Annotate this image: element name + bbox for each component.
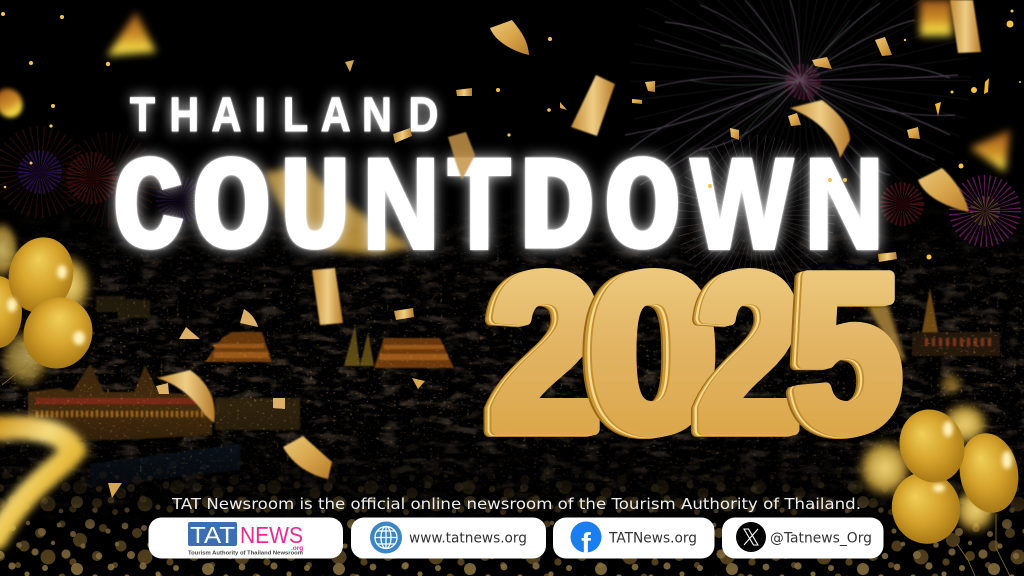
title: COUNTDOWN: U [280, 136, 351, 286]
year 2025 in gold: 2 [490, 228, 602, 476]
title: COUNTDOWN: C [113, 136, 184, 286]
confetti: tiny gold specks [1, 10, 1021, 260]
pill: facebook [553, 518, 714, 560]
pill: website: www.tatnews.org [409, 530, 527, 546]
title: COUNTDOWN: N [804, 133, 884, 276]
city skyline at night [0, 200, 1024, 520]
pill: X account: @Tatnews_Org [770, 530, 872, 546]
firework: right magenta [891, 193, 1003, 229]
logo: TAT blue box [188, 522, 237, 546]
title: COUNTDOWN: D [519, 136, 595, 286]
icon: X logo [736, 522, 766, 552]
title: COUNTDOWN: W [691, 133, 793, 276]
title: COUNTDOWN: N [363, 133, 439, 275]
caption: TAT Newsroom is the official online newsroom of the Tourism Authority of Thailand. [171, 495, 861, 513]
confetti: sharp pieces [108, 20, 989, 498]
year 2025 in gold: 5 [793, 228, 903, 477]
pill: website [351, 518, 546, 558]
title: COUNTDOWN: O [192, 138, 271, 287]
title: THAILAND: THAILAND [130, 88, 438, 142]
pill: TATNews logo: NEWS [240, 522, 303, 548]
balloons: right cluster [857, 401, 1024, 576]
year 2025 in gold [490, 227, 903, 477]
year 2025 in gold: 0 [589, 229, 719, 477]
pill: facebook: TATNews.org [608, 530, 697, 546]
title: COUNTDOWN: T [448, 132, 511, 276]
firework: top right [625, 0, 958, 190]
firework: lower title [715, 175, 795, 255]
pill: TATNews logo: Tourism Authority of Thailand Newsroom [188, 550, 304, 556]
pill: TATNews logo: TAT [190, 522, 235, 548]
title: COUNTDOWN [113, 132, 884, 287]
icon: facebook [570, 522, 602, 560]
pill: X account [722, 518, 884, 558]
blurred confetti behind title [265, 166, 412, 254]
confetti: large blurred pieces [0, 0, 1010, 393]
pill: TATNews logo [148, 518, 343, 558]
icon: facebook: f [581, 528, 591, 560]
gold ribbon bottom left [0, 428, 74, 538]
title: COUNTDOWN: O [604, 136, 680, 286]
pill: TATNews logo: .org [291, 545, 303, 552]
glitter field [0, 455, 1024, 576]
year 2025 in gold: 2 [697, 227, 802, 476]
icon: globe [370, 522, 402, 554]
balloons: left cluster [0, 220, 105, 388]
firework: left purple and red [17, 149, 192, 212]
